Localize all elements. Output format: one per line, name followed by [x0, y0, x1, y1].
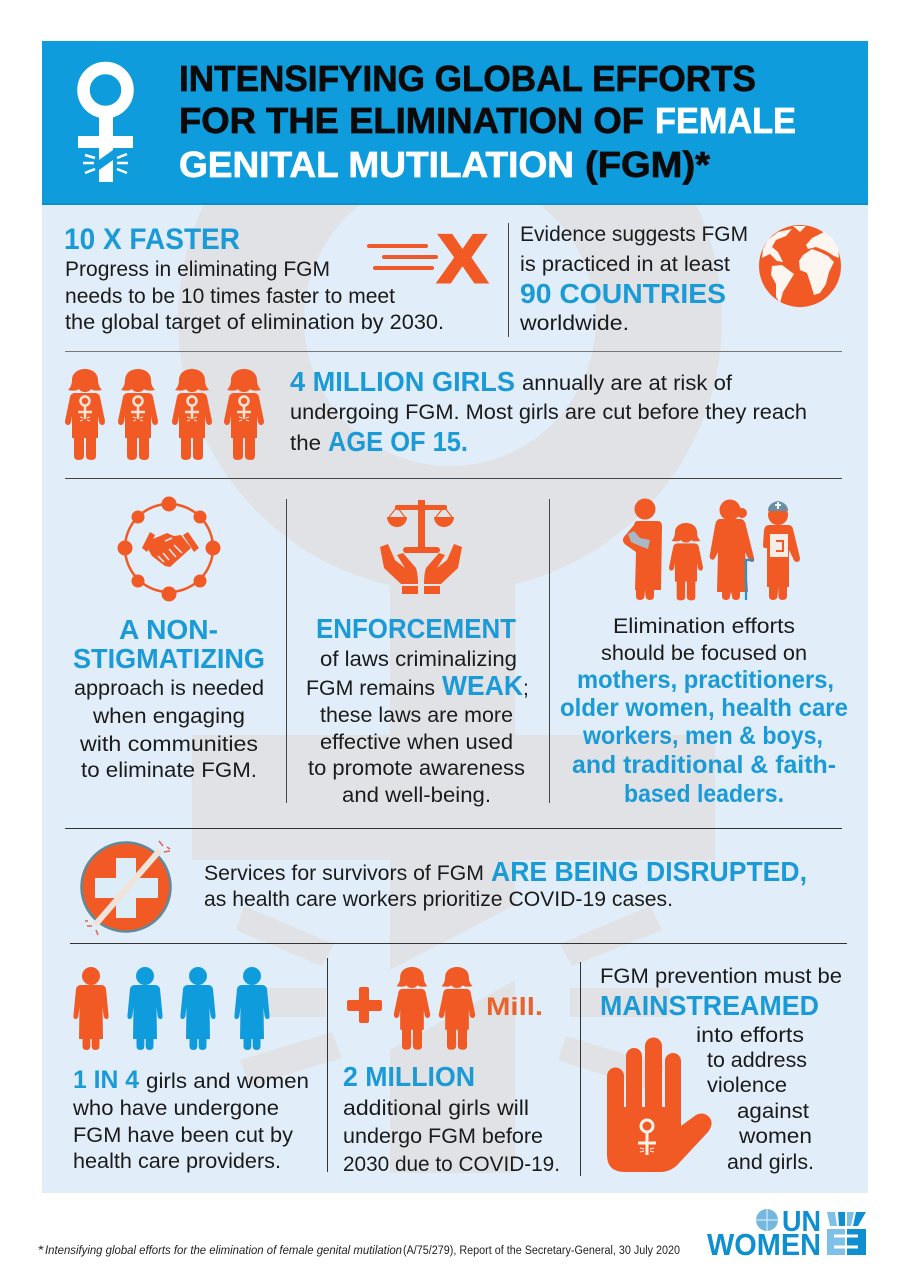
panel: non-stigmatizing	[73, 496, 265, 782]
icon: health worker	[763, 501, 800, 600]
panel: enforcement	[306, 500, 529, 807]
text block: effective when used	[320, 731, 513, 754]
title: FEMALE	[655, 100, 796, 141]
icon: girl	[669, 523, 703, 600]
text block: should be focused on	[601, 642, 807, 665]
watermark: venus symbol	[178, 48, 722, 1173]
icon: scales in hands	[380, 500, 462, 594]
text block	[290, 366, 807, 457]
text block	[519, 223, 748, 335]
panel: 4 million girls	[65, 366, 807, 460]
text block: as health care workers prioritize COVID-19 cases.	[204, 888, 673, 911]
text block: Evidence suggests FGM	[520, 223, 748, 246]
title: (FGM)*	[585, 144, 710, 185]
footnote	[38, 1245, 680, 1257]
text block	[65, 258, 444, 334]
text block: WEAK	[442, 670, 523, 701]
text block: girls and women	[146, 1070, 309, 1093]
text block: annually are at risk of	[522, 372, 732, 395]
text block: 4 MILLION GIRLS	[290, 366, 515, 397]
header band	[42, 41, 868, 205]
title: GENITAL MUTILATION	[179, 144, 574, 185]
text block: against	[737, 1100, 809, 1123]
title: FOR THE ELIMINATION OF	[179, 100, 644, 141]
footnote: Intensifying global efforts for the elimination of female genital mutilation	[45, 1245, 402, 1257]
text block: when engaging	[92, 705, 245, 728]
text block: to eliminate FGM.	[81, 759, 257, 782]
text block: Elimination efforts	[613, 615, 795, 638]
panel: services disrupted	[82, 841, 807, 935]
text block: women	[738, 1125, 812, 1148]
heading: 10 X FASTER	[64, 223, 240, 256]
panel: 2 million	[343, 967, 560, 1176]
text block: who have undergone	[72, 1097, 279, 1120]
text block: into efforts	[696, 1024, 804, 1047]
text block: AGE OF 15.	[328, 426, 468, 457]
text block: these laws are more	[320, 704, 513, 727]
text block	[306, 613, 529, 807]
text block: FGM have been cut by	[73, 1124, 294, 1147]
icon: crossed-out health cross	[82, 841, 170, 935]
text block	[72, 1066, 309, 1173]
text block	[600, 965, 842, 1174]
icon: plus two girls: Mill.	[486, 993, 543, 1021]
text block: workers, men & boys,	[582, 722, 823, 750]
icon: raised hand	[607, 1038, 712, 1172]
panel: 1 in 4	[72, 967, 309, 1173]
panel: 10 x faster	[64, 221, 487, 334]
text block: to address	[707, 1049, 807, 1072]
text block: worldwide.	[519, 312, 629, 335]
icon: plus two girls	[347, 967, 543, 1050]
text block: MAINSTREAMED	[600, 990, 819, 1021]
text block: ARE BEING DISRUPTED,	[491, 856, 807, 887]
panel: elimination efforts	[560, 498, 848, 808]
text block: A NON-	[119, 614, 218, 645]
text block: and traditional & faith-	[572, 751, 836, 779]
icon: family and health worker	[623, 498, 800, 600]
text block: is practiced in at least	[520, 253, 730, 276]
text block: with communities	[79, 733, 258, 756]
icon: globe	[759, 225, 841, 307]
icon: handshake in ring	[118, 496, 220, 602]
text block: and well-being.	[342, 784, 491, 807]
logo: UN Women: UN	[782, 1206, 821, 1238]
icon: four women	[73, 967, 270, 1050]
text block: approach is needed	[74, 677, 264, 700]
icon: older woman with cane	[710, 500, 754, 600]
text block: to promote awareness	[308, 757, 525, 780]
text block: FGM remains	[306, 677, 435, 700]
footnote: (A/75/279), Report of the Secretary-General, 30 July 2020	[403, 1245, 680, 1257]
text block: older women, health care	[560, 694, 848, 722]
footnote: *	[38, 1245, 45, 1257]
text block: violence	[707, 1074, 787, 1097]
text block	[560, 615, 848, 808]
text block: of laws criminalizing	[320, 648, 517, 671]
text block: the	[290, 432, 321, 455]
panel: mainstreamed	[600, 965, 842, 1174]
text block: undergo FGM before	[343, 1125, 543, 1148]
text block: ;	[523, 677, 529, 700]
text block: undergoing FGM. Most girls are cut before they reach	[290, 401, 807, 424]
text block: STIGMATIZING	[73, 643, 265, 674]
text block: health care providers.	[73, 1150, 281, 1173]
text block	[204, 856, 807, 911]
icon: mother and baby	[623, 498, 662, 600]
text block: 1 IN 4	[73, 1066, 139, 1094]
text block: mothers, practitioners,	[577, 666, 834, 694]
panel: 90 countries	[519, 223, 841, 335]
text block: FGM prevention must be	[600, 965, 842, 988]
icon: broken venus symbol	[78, 68, 133, 182]
text block: based leaders.	[624, 780, 784, 808]
text block: and girls.	[727, 1151, 814, 1174]
text block: additional girls will	[343, 1097, 529, 1120]
text block	[73, 614, 265, 782]
text block: 90 COUNTRIES	[520, 278, 726, 309]
title	[179, 58, 796, 185]
text block: 2030 due to COVID-19.	[343, 1153, 560, 1176]
logo: UN Women	[707, 1206, 866, 1262]
logo: UN Women: WOMEN	[707, 1227, 821, 1262]
icon: speed x: X	[438, 221, 487, 297]
text block	[343, 1061, 560, 1176]
text block: Progress in eliminating FGM	[65, 258, 330, 281]
text block: ENFORCEMENT	[316, 613, 516, 644]
icon: speed x	[369, 221, 487, 297]
title: INTENSIFYING GLOBAL EFFORTS	[179, 58, 756, 99]
icon: four girls	[65, 369, 264, 460]
text block: 2 MILLION	[343, 1061, 475, 1092]
text block: Services for survivors of FGM	[204, 862, 484, 885]
text block: the global target of elimination by 2030.	[65, 311, 444, 334]
text block: needs to be 10 times faster to meet	[65, 285, 395, 308]
